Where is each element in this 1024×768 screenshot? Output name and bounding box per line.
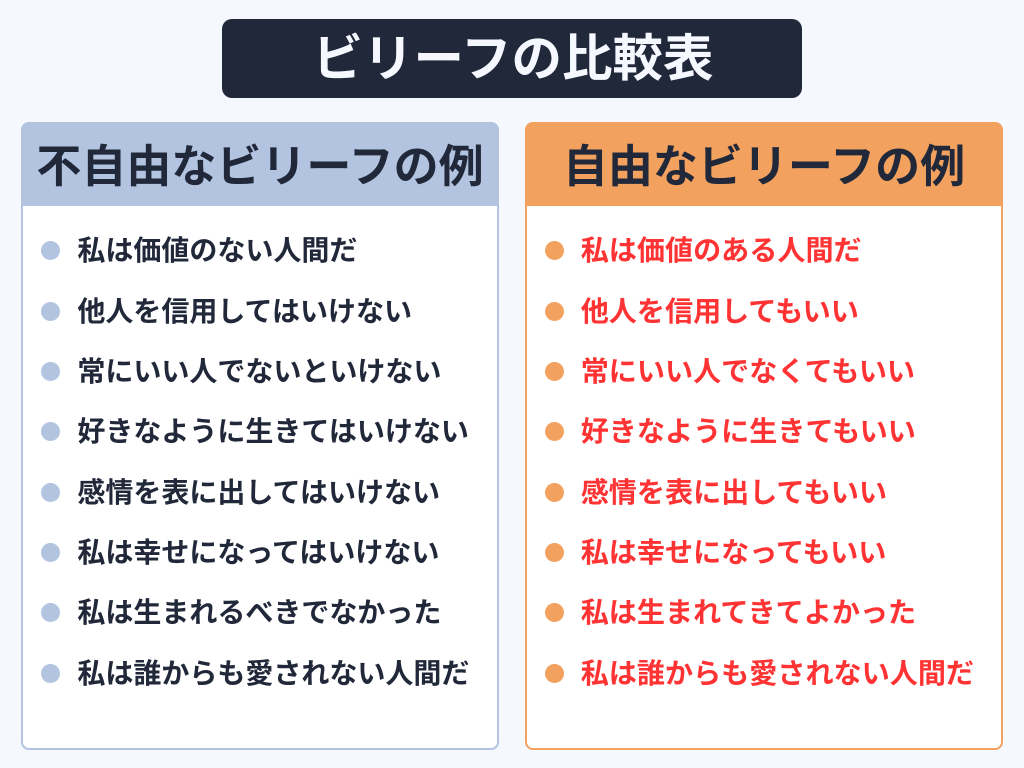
- list item 1: 私は価値のある人間だ: [581, 235, 862, 266]
- title: [222, 19, 802, 98]
- list item 4: 好きなように生きてはいけない: [77, 416, 469, 447]
- list item 7: 私は生まれるべきでなかった: [77, 597, 441, 628]
- list item 3: 常にいい人でなくてもいい: [581, 356, 915, 387]
- heading: free beliefs: [525, 122, 1003, 206]
- list item 2: 他人を信用してもいい: [581, 296, 859, 327]
- heading: limiting beliefs: 不自由なビリーフの例: [36, 141, 484, 192]
- title: ビリーフの比較表: [312, 30, 713, 87]
- list item 1: 私は価値のない人間だ: [77, 235, 357, 266]
- list item 3: 常にいい人でないといけない: [77, 356, 441, 387]
- list item 5: 感情を表に出してはいけない: [77, 477, 440, 508]
- list item 8: 私は誰からも愛されない人間だ: [581, 658, 974, 689]
- list item 6: 私は幸せになってもいい: [581, 537, 886, 568]
- list item 2: 他人を信用してはいけない: [77, 296, 412, 327]
- panel: free beliefs: [525, 122, 1003, 750]
- list item 4: 好きなように生きてもいい: [581, 416, 916, 447]
- list item 6: 私は幸せになってはいけない: [77, 537, 439, 568]
- list item 8: 私は誰からも愛されない人間だ: [77, 658, 469, 689]
- list item 7: 私は生まれてきてよかった: [581, 597, 916, 628]
- list item 5: 感情を表に出してもいい: [581, 477, 887, 508]
- panel: limiting beliefs: [21, 122, 499, 750]
- heading: limiting beliefs: [21, 122, 499, 206]
- heading: free beliefs: 自由なビリーフの例: [563, 141, 965, 192]
